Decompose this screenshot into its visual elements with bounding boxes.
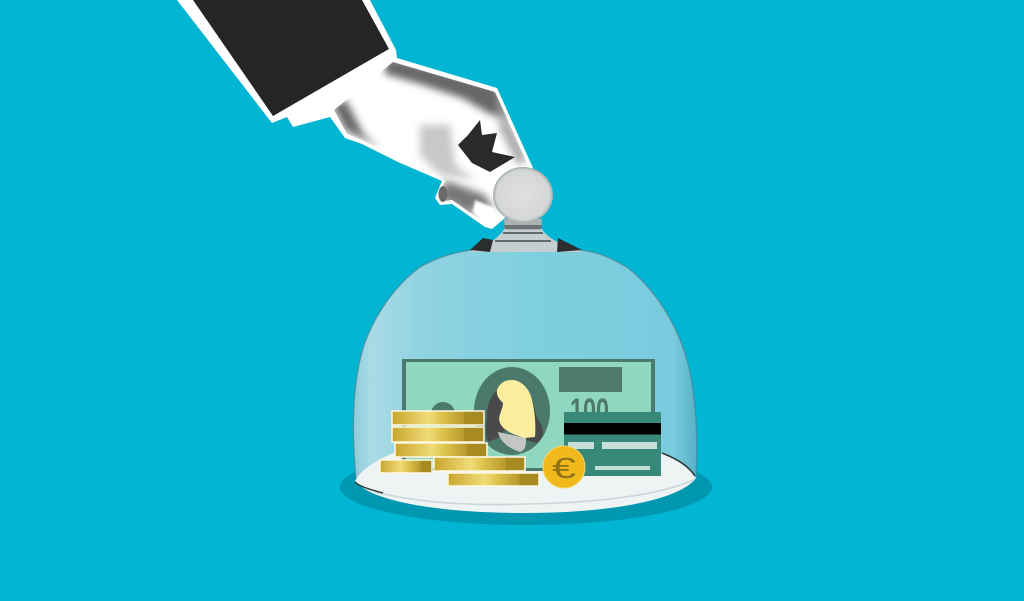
magnetic stripe: [564, 423, 661, 434]
portrait face: [497, 380, 535, 438]
handle dark reflections: [470, 238, 582, 252]
euro sign: €: [552, 453, 576, 485]
plate rim: [375, 479, 695, 505]
hand and sleeve: [177, 0, 533, 229]
hundred-dollar bill: [404, 360, 653, 470]
glass knob: [493, 167, 553, 223]
wrist shading: [332, 100, 380, 148]
dome shadow: [340, 449, 712, 525]
coin 5: [434, 457, 525, 471]
card body: [564, 412, 661, 476]
glass plate: [355, 450, 696, 513]
dome body: [353, 250, 697, 478]
coin 4: [380, 460, 432, 473]
handle stem: [504, 219, 542, 230]
credit card: [564, 412, 661, 476]
bill denomination: 100: [570, 392, 609, 430]
bill corner mark: [431, 402, 455, 426]
coin 3: [395, 443, 487, 457]
portrait collar: [498, 432, 526, 452]
fingers shading: [497, 95, 528, 165]
knob neck: [504, 225, 542, 229]
thumb shading: [440, 180, 495, 222]
little finger: [438, 186, 448, 202]
bill paper: [404, 360, 653, 470]
dark gap between fingers: [458, 120, 515, 172]
knuckle shading: [420, 125, 475, 180]
coin 2: [392, 427, 484, 442]
gold coin stacks: [380, 411, 539, 486]
portrait oval: [474, 367, 550, 455]
hand halftone shading: [332, 58, 528, 222]
bill label block: [559, 367, 622, 392]
white cut-out outline: [177, 0, 533, 229]
handle neck bands: [495, 233, 551, 241]
coin disc: [543, 446, 585, 488]
illustration: hand lifting a glass dome over money: [177, 0, 712, 525]
coin 1: [392, 411, 484, 425]
coin 6: [448, 473, 539, 486]
card lines: [568, 442, 657, 470]
handle base: [468, 228, 584, 252]
glass dome: [353, 250, 697, 513]
portrait hair: [486, 390, 543, 443]
black sleeve: [193, 0, 389, 116]
dome handle: [468, 167, 584, 252]
plate dark edge: [355, 453, 695, 493]
fingertip highlight: [473, 200, 498, 224]
euro coin: [543, 446, 585, 488]
dome edge: [353, 250, 697, 478]
top of hand shading: [385, 58, 512, 120]
